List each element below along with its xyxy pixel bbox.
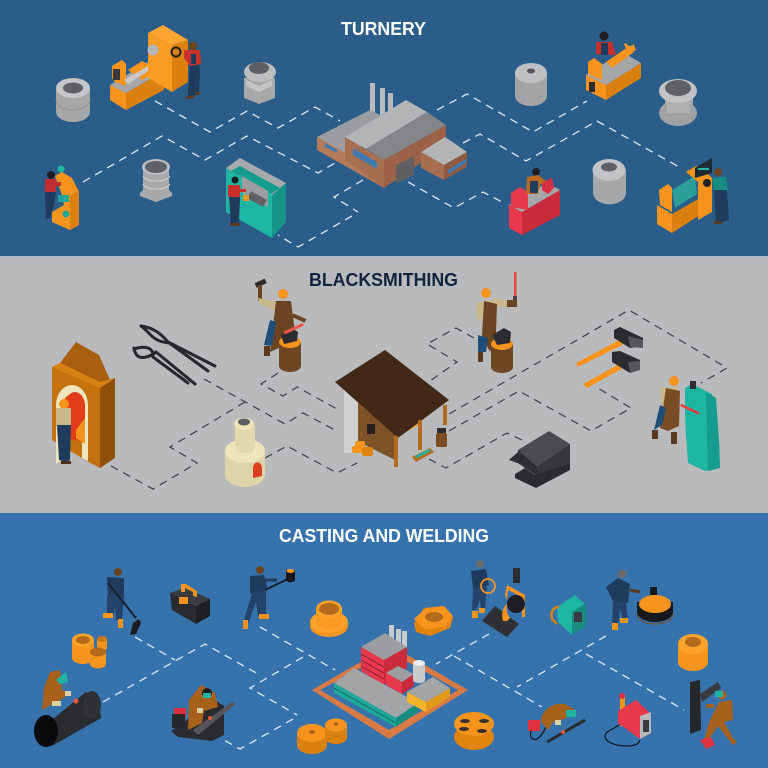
icon: welder at steel column bbox=[690, 680, 737, 749]
icon: teal lathe with worker bbox=[226, 158, 286, 238]
icon: gray cylinder with bolted top bbox=[592, 159, 626, 204]
icon: gray flanged spool bbox=[659, 79, 697, 126]
icon: smith at teal power hammer bbox=[652, 376, 720, 471]
icon: toolbox bbox=[170, 584, 210, 624]
icon: orange ring casting bbox=[310, 600, 348, 637]
icon: anvil bbox=[509, 431, 570, 488]
icon: worker with tilting crucible bbox=[471, 560, 525, 637]
icon: orange tube bbox=[678, 634, 708, 671]
icon: blacksmith tongs bbox=[134, 326, 215, 384]
icon: factory building bbox=[317, 83, 467, 188]
icon: crouching welder with cable bbox=[528, 704, 585, 742]
panel: turnery bbox=[0, 0, 768, 256]
icon: red machine with worker bbox=[509, 168, 560, 235]
icon: red welding power unit bbox=[605, 693, 651, 746]
icon: orange pipe fittings bbox=[72, 634, 107, 668]
icon: smith holding hot blade bbox=[476, 272, 517, 373]
icon: hex nut bbox=[414, 606, 453, 636]
icon: clay furnace bbox=[225, 418, 265, 487]
icon: gray sleeve bbox=[56, 78, 90, 122]
icon: industrial plant model bbox=[312, 625, 468, 739]
icon: sledge hammers bbox=[576, 327, 643, 388]
icon: worker with casting pot bbox=[606, 570, 673, 630]
connector lines: casting and welding bbox=[103, 627, 684, 749]
icon: teal welding mask bbox=[552, 595, 586, 635]
icon: cable spool bbox=[454, 712, 494, 750]
icon: welder on large pipe bbox=[34, 670, 101, 747]
icon: ribbed gray part bbox=[140, 159, 172, 202]
heading: turnery: TURNERY bbox=[341, 19, 426, 39]
icon: gray cylinder with small hole bbox=[515, 63, 547, 106]
icon: flanged gray part bbox=[244, 62, 276, 104]
icon: orange lathe with worker bbox=[110, 25, 201, 110]
icon: smithy workshop bbox=[335, 350, 449, 467]
icon: orange discs bbox=[297, 718, 347, 754]
icon: worker with crucible bbox=[243, 566, 295, 629]
icon: worker at orange milling machine bbox=[45, 166, 79, 230]
connector lines: turnery bbox=[83, 94, 681, 247]
heading: casting and welding: CASTING AND WELDING bbox=[279, 526, 489, 546]
icon: welder at steel beam bbox=[171, 685, 236, 741]
icon: orange lathe with seated worker bbox=[586, 32, 641, 100]
panel: casting and welding bbox=[0, 513, 768, 768]
heading: blacksmithing: BLACKSMITHING bbox=[309, 270, 458, 290]
icon: smith hammering on barrel anvil bbox=[255, 279, 306, 372]
icon: orange machine with screen and worker bbox=[657, 158, 729, 233]
connector lines: blacksmithing bbox=[111, 310, 727, 489]
icon: forge with worker bbox=[52, 342, 115, 468]
panel: blacksmithing bbox=[0, 256, 768, 513]
icon: worker with ladle bbox=[103, 568, 141, 635]
